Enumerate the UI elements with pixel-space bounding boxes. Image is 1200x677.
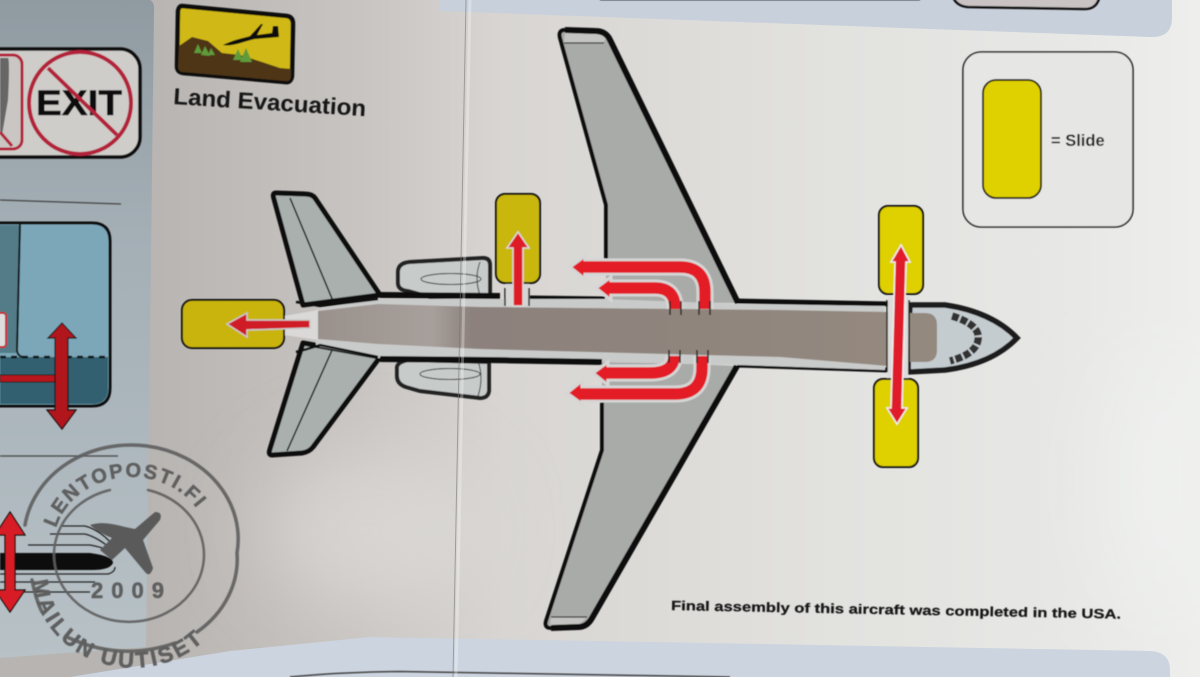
cockpit windows xyxy=(950,316,978,361)
slide: nose lower xyxy=(874,379,918,467)
slide: rear upper xyxy=(496,194,540,283)
bottom panel background xyxy=(70,637,1170,677)
nose xyxy=(908,305,1017,372)
stamp year: 2009 xyxy=(91,578,172,603)
lower wing xyxy=(546,360,737,628)
top right panel background xyxy=(440,0,1172,37)
nose door gap xyxy=(887,296,909,380)
stamp bottom text: MAILUN UUTISET xyxy=(34,578,200,668)
assembly note: Final assembly of this aircraft was completed in the USA. xyxy=(671,598,1121,622)
slide: tail xyxy=(182,300,284,348)
slide legend xyxy=(963,52,1133,227)
left panel divider xyxy=(0,455,118,457)
door prohibited fragment xyxy=(0,55,22,149)
fuselage outline and body xyxy=(316,299,885,370)
rear door gap xyxy=(506,284,529,306)
exit door marks xyxy=(669,301,710,363)
fuselage cabin floor xyxy=(318,304,888,366)
left panel: slide bar and double arrow xyxy=(0,512,116,612)
red horizontal bar xyxy=(0,375,58,382)
stamp plane xyxy=(90,512,161,574)
top cropped boxes xyxy=(600,0,1100,9)
left panel background xyxy=(0,0,154,658)
left panel: no exit sign xyxy=(0,49,140,157)
upper wing xyxy=(560,30,738,303)
prohibition circle xyxy=(29,52,131,154)
left panel divider xyxy=(0,200,121,204)
legend slide swatch xyxy=(983,80,1041,198)
arrow: tail slide xyxy=(227,313,310,337)
arrow: rear upper slide xyxy=(507,232,529,306)
left panel: aircraft cabin diagram xyxy=(0,223,110,429)
red double arrow xyxy=(47,323,76,429)
bottom rule xyxy=(290,672,730,677)
slide: nose upper xyxy=(879,206,923,294)
lower tail xyxy=(269,343,380,455)
upper tail xyxy=(273,193,380,305)
exit arrows over wing xyxy=(567,256,705,404)
lower engine xyxy=(397,360,489,398)
tail door opening xyxy=(284,310,318,340)
legend label: = Slide xyxy=(1051,132,1105,150)
stamp top text: LENTOPOSTI.FI xyxy=(42,462,207,528)
icon: land evacuation xyxy=(177,6,293,82)
page crease xyxy=(453,0,470,677)
heading: Land Evacuation: Land Evacuation xyxy=(173,83,367,121)
EXIT text: EXIT xyxy=(36,84,122,123)
stamp: LENTOPOSTI.FI MAILUN UUTISET 2009 xyxy=(22,442,240,668)
arrow: nose double xyxy=(887,245,910,424)
upper engine xyxy=(398,258,490,297)
aircraft diagram xyxy=(182,30,1017,628)
